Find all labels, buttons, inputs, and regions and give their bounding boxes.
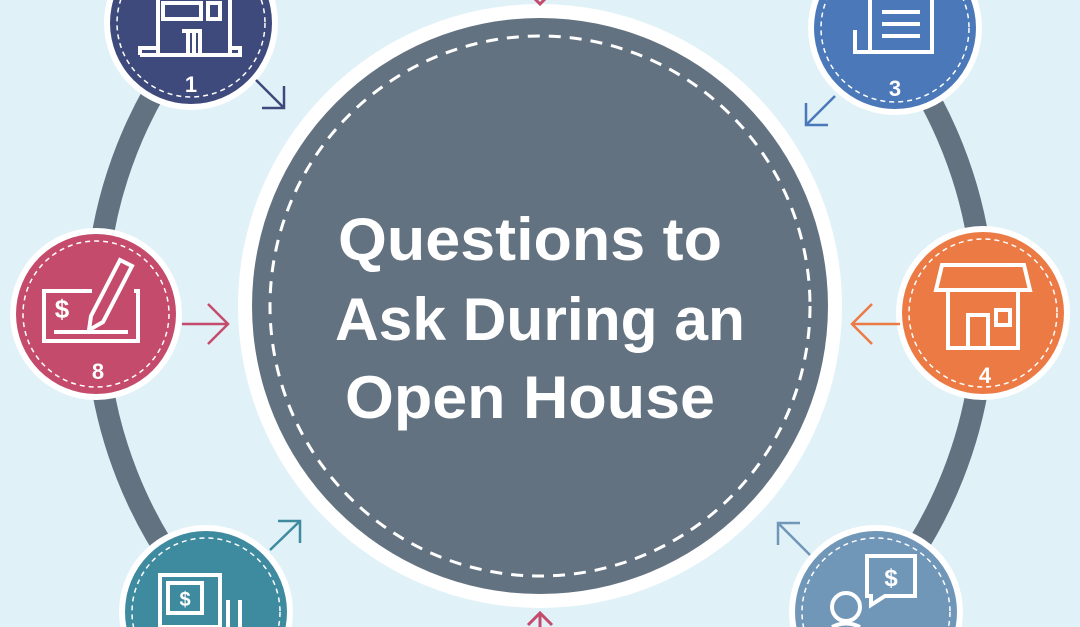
arrow bottom-right [778,523,810,555]
icon: storefront [936,265,1030,348]
node 1 [104,0,278,110]
node 4 [896,226,1070,400]
arrow 8 [182,304,228,344]
node 4: 4 [979,363,992,388]
node 1: 1 [185,72,197,97]
icon: building [140,0,240,55]
title: Open House [345,364,715,431]
title [335,206,745,431]
node bottom-right: $ [884,565,898,592]
arrow 4 [852,304,900,344]
node 8: 8 [92,359,104,384]
arrow bottom-left [270,521,300,550]
title: Ask During an [335,286,745,353]
icon: person with speech bubble [832,556,915,627]
title: Questions to [338,206,722,273]
icon: atm [160,575,240,627]
icon: cheque and pen [44,260,138,341]
node 3 [808,0,982,115]
icon: document [855,0,932,52]
arrow 3 [806,96,835,125]
node 8: $ [55,294,70,324]
node 8 [10,228,182,400]
arrow: top pink [528,0,552,4]
arrow: bottom pink [528,613,552,627]
node 3: 3 [889,76,901,101]
center circle [238,4,842,608]
node bottom-right [789,525,963,627]
node bottom-left: $ [179,589,191,611]
arrow 1 [256,80,284,108]
node bottom-left [119,525,293,627]
